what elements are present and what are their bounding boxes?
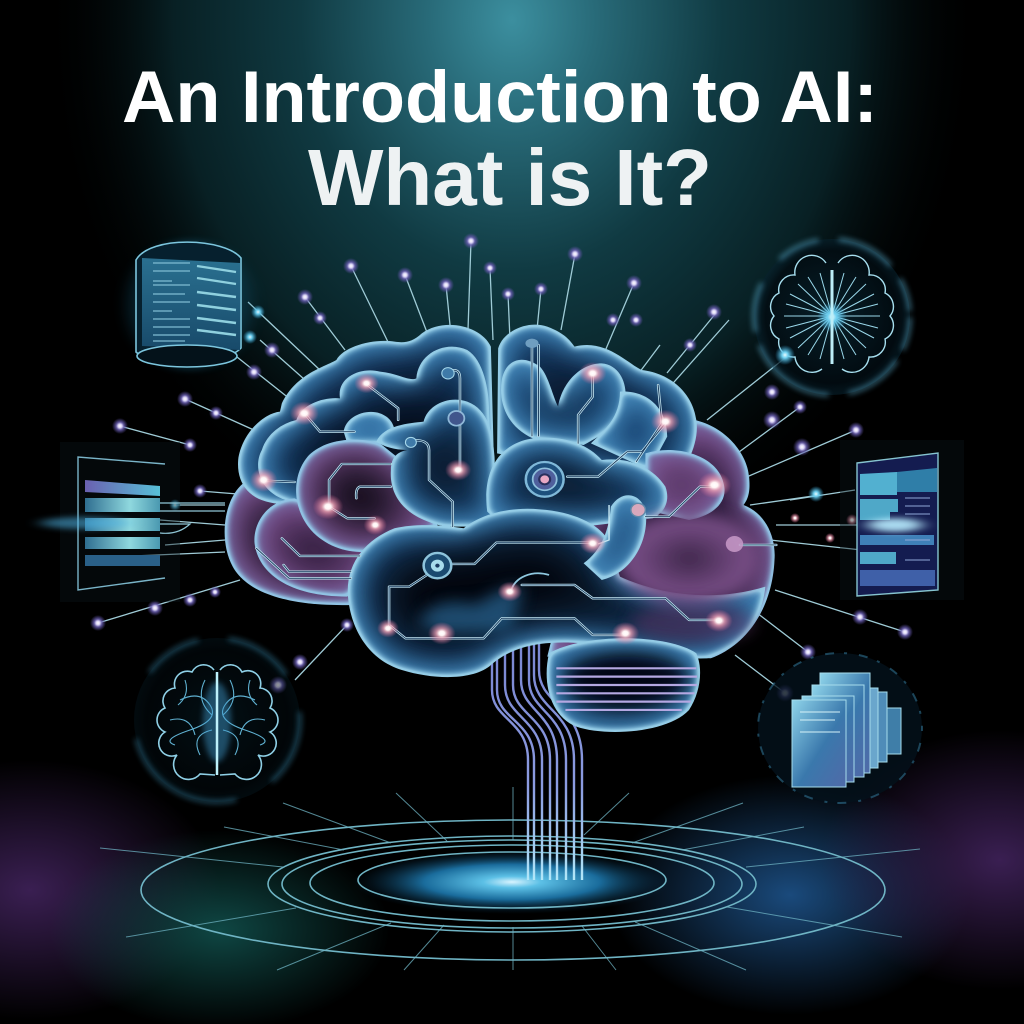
- spiral node: [405, 437, 416, 447]
- stacked pages: [792, 673, 901, 787]
- circuit traces: [256, 345, 776, 638]
- globe: brain, bottom left: [134, 638, 300, 802]
- data panel: [142, 258, 240, 350]
- radial fibres: [784, 271, 880, 361]
- central eye node: [526, 462, 564, 497]
- brain outline: [157, 665, 278, 779]
- central glow line: [203, 682, 231, 762]
- left inner folded lobe: [258, 347, 493, 517]
- vertical connector: [598, 505, 609, 544]
- brain outline: [771, 255, 893, 372]
- temporal right purple tint: [631, 603, 754, 643]
- cylinder base ring: [137, 345, 237, 367]
- glowing platform core: [352, 850, 672, 914]
- central fold lobe: [376, 400, 497, 527]
- brain: [225, 325, 776, 732]
- glowing synapses: [250, 362, 733, 645]
- data cylinder, top left: [128, 239, 252, 371]
- trunk wires: [492, 640, 582, 880]
- screen frame: [78, 457, 165, 590]
- right inner lobe: [591, 392, 667, 470]
- radial spokes: [100, 787, 920, 970]
- title: What is It?: [308, 133, 712, 222]
- upper left spiral node: [442, 368, 454, 379]
- arc connector: [511, 573, 549, 592]
- small ring node: [448, 411, 464, 426]
- connector lines and nodes around the brain: [90, 233, 913, 702]
- globe: radial brain, top right: [754, 239, 910, 395]
- top right spiral node: [525, 339, 539, 348]
- data rows: [197, 266, 236, 335]
- title: An Introduction to AI:: [122, 57, 878, 138]
- brain folds: [170, 680, 265, 755]
- left data screen: [40, 442, 225, 602]
- screen bars: [85, 480, 160, 566]
- left middle purple lobe: [296, 440, 438, 552]
- right purple mass over temporal lobe: [611, 508, 767, 608]
- temporal inner fold: [419, 586, 524, 633]
- right heart lobe: [501, 360, 626, 445]
- small upper lobe: [344, 412, 395, 443]
- cylinder body: [136, 242, 241, 362]
- screen glow: [867, 518, 923, 532]
- globe: document stack, bottom right: [758, 653, 922, 803]
- screen glow: [40, 517, 130, 529]
- rings: [141, 820, 885, 960]
- right small lobe: [584, 495, 646, 580]
- screen connectors: [160, 503, 225, 533]
- title: [122, 57, 878, 222]
- right data screen: [840, 440, 964, 600]
- lower left eye node: [424, 553, 451, 578]
- cerebellum: [547, 638, 700, 732]
- left lower purple lobe: [254, 498, 391, 597]
- left top lobe: [238, 325, 495, 510]
- globe connector node: [775, 345, 795, 365]
- screen frame: [857, 453, 938, 596]
- right middle purple lobe: [645, 450, 725, 520]
- platform: concentric rings and spokes: [100, 787, 920, 970]
- screen text lines: [905, 498, 930, 560]
- temporal lobe: [348, 509, 765, 677]
- page lines: [800, 712, 840, 732]
- right top lobe: [497, 325, 697, 487]
- right ring nodes: [631, 503, 743, 552]
- right back purple lobe: [547, 420, 775, 658]
- centre round lobe: [486, 438, 667, 527]
- left back lobe: [225, 482, 402, 605]
- screen panels: [860, 468, 937, 586]
- central star: [817, 302, 847, 332]
